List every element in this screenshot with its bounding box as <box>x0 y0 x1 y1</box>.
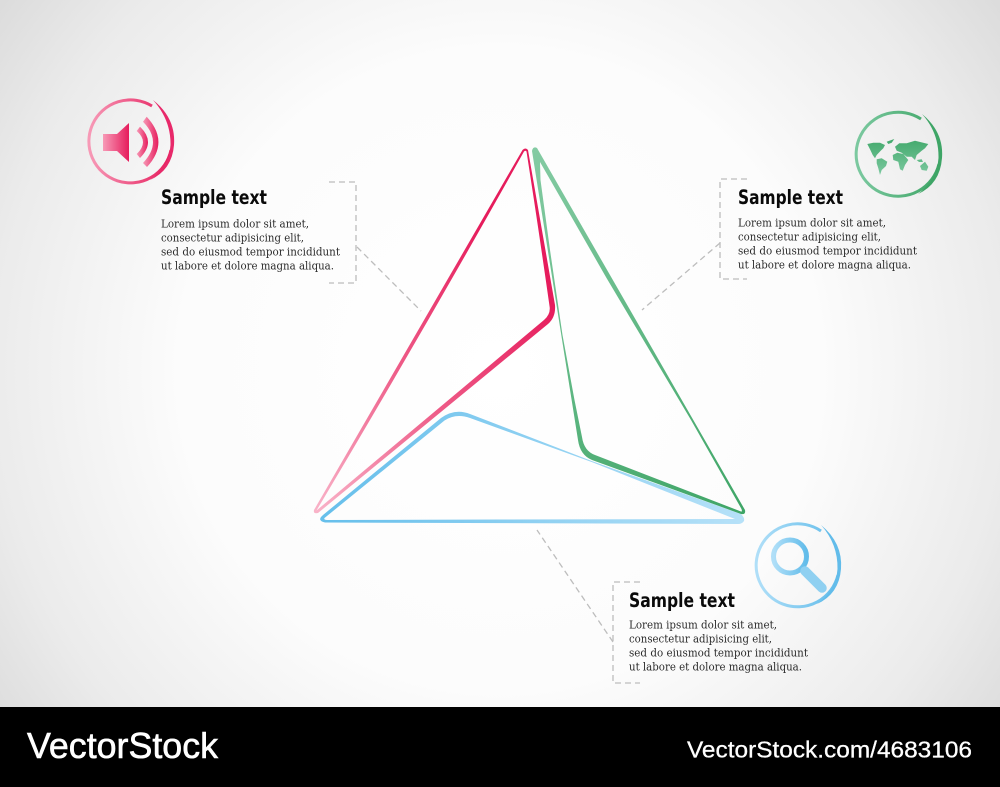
text block: blue: consectetur adipisicing elit, <box>629 632 772 646</box>
watermark bar: VectorStock.com/4683106 <box>687 736 972 762</box>
text block: blue: Lorem ipsum dolor sit amet, <box>629 618 777 632</box>
triangle diagram <box>314 147 745 524</box>
text block: blue: Sample text <box>629 589 735 612</box>
text block: green: Lorem ipsum dolor sit amet, <box>738 216 886 230</box>
text block: blue <box>629 589 808 674</box>
icon: world map <box>856 112 942 196</box>
icon: magnifier <box>756 524 841 607</box>
watermark bar: VectorStock <box>27 725 219 766</box>
watermark bar <box>0 707 1000 787</box>
connector: green callout <box>642 179 747 310</box>
text block: green: Sample text <box>738 186 843 209</box>
text block: green: ut labore et dolore magna aliqua. <box>738 258 911 272</box>
icon: speaker <box>89 100 174 183</box>
text block: blue: ut labore et dolore magna aliqua. <box>629 660 802 674</box>
pink segment <box>314 148 555 513</box>
text block: green <box>738 186 917 272</box>
text block: pink: sed do eiusmod tempor incididunt <box>161 244 340 258</box>
text block: pink: Sample text <box>161 186 267 209</box>
text block: pink <box>161 186 340 272</box>
blue segment <box>320 412 744 524</box>
text block: green: sed do eiusmod tempor incididunt <box>738 244 917 258</box>
text block: pink: ut labore et dolore magna aliqua. <box>161 258 334 272</box>
connector: pink callout <box>329 182 421 311</box>
green segment <box>532 147 745 514</box>
text block: blue: sed do eiusmod tempor incididunt <box>629 646 808 660</box>
text block: pink: consectetur adipisicing elit, <box>161 230 304 244</box>
connector: blue callout <box>537 530 640 683</box>
text block: green: consectetur adipisicing elit, <box>738 230 881 244</box>
text block: pink: Lorem ipsum dolor sit amet, <box>161 216 309 230</box>
